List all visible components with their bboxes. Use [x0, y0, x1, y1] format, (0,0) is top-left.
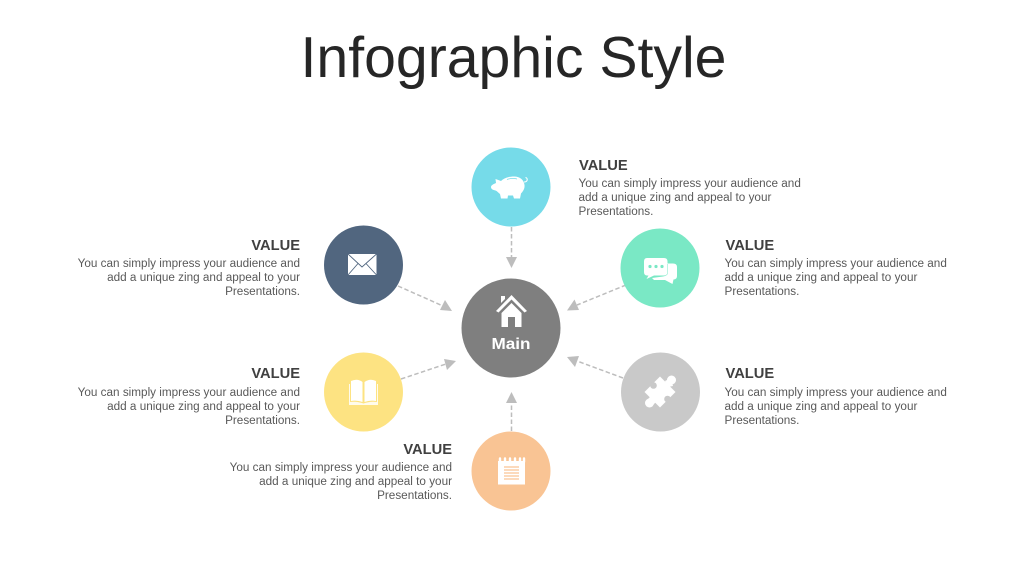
text: bottom value: VALUE — [403, 442, 452, 458]
text: top value: VALUE — [579, 158, 628, 174]
title: Infographic Style — [301, 26, 726, 90]
text: upper left value: add a unique zing and appeal to your — [107, 271, 300, 284]
node: mail — [324, 226, 403, 304]
icon: house — [496, 295, 527, 327]
text: upper left value: You can simply impress your audience and — [78, 257, 300, 270]
text: lower left value: You can simply impress your audience and — [78, 386, 300, 399]
text: lower left value: VALUE — [251, 366, 300, 382]
text: upper right value: You can simply impress your audience and — [724, 257, 947, 270]
node: piggy bank — [472, 148, 550, 226]
text: upper right value: Presentations. — [724, 285, 799, 298]
main label: Main — [492, 336, 530, 353]
text: bottom value — [230, 442, 452, 502]
node: puzzle — [621, 352, 700, 432]
arrow: notepad to main — [506, 392, 517, 431]
text: top value: add a unique zing and appeal to your — [578, 191, 771, 204]
text: lower left value: add a unique zing and appeal to your — [107, 400, 300, 413]
icon: envelope — [348, 254, 376, 275]
text: lower right value: Presentations. — [724, 414, 799, 427]
text: lower right value: VALUE — [726, 366, 774, 382]
icon: piggy bank — [491, 176, 527, 198]
text: top value — [578, 158, 801, 218]
text: top value: You can simply impress your audience and — [578, 177, 801, 190]
text: upper right value — [724, 238, 947, 298]
text: top value: Presentations. — [578, 205, 653, 218]
text: upper right value: add a unique zing and appeal to your — [724, 271, 917, 284]
node: chat — [620, 228, 700, 308]
text: lower right value: You can simply impress your audience and — [724, 386, 947, 399]
arrow: mail to main — [398, 286, 452, 311]
text: lower left value: Presentations. — [225, 414, 300, 427]
icon: chat bubbles — [644, 258, 677, 284]
text: bottom value: add a unique zing and appeal to your — [259, 475, 452, 488]
arrow: puzzle to main — [567, 356, 623, 378]
text: upper left value: VALUE — [251, 238, 300, 254]
text: upper left value — [78, 238, 300, 298]
text: lower left value — [78, 366, 300, 427]
text: upper right value: VALUE — [726, 238, 774, 254]
icon: open book — [349, 380, 378, 405]
text: bottom value: You can simply impress your audience and — [230, 461, 452, 474]
main node — [462, 278, 560, 378]
node: notepad — [472, 432, 550, 510]
text: upper left value: Presentations. — [225, 285, 300, 298]
arrow: book to main — [401, 359, 456, 379]
arrow: chat to main — [567, 285, 626, 310]
icon: puzzle piece — [644, 376, 676, 408]
icon: notepad — [498, 458, 525, 484]
text: lower right value — [724, 366, 947, 427]
text: bottom value: Presentations. — [377, 489, 452, 502]
arrow: top to main — [506, 227, 517, 268]
node: book — [324, 352, 403, 432]
text: lower right value: add a unique zing and appeal to your — [724, 400, 917, 413]
